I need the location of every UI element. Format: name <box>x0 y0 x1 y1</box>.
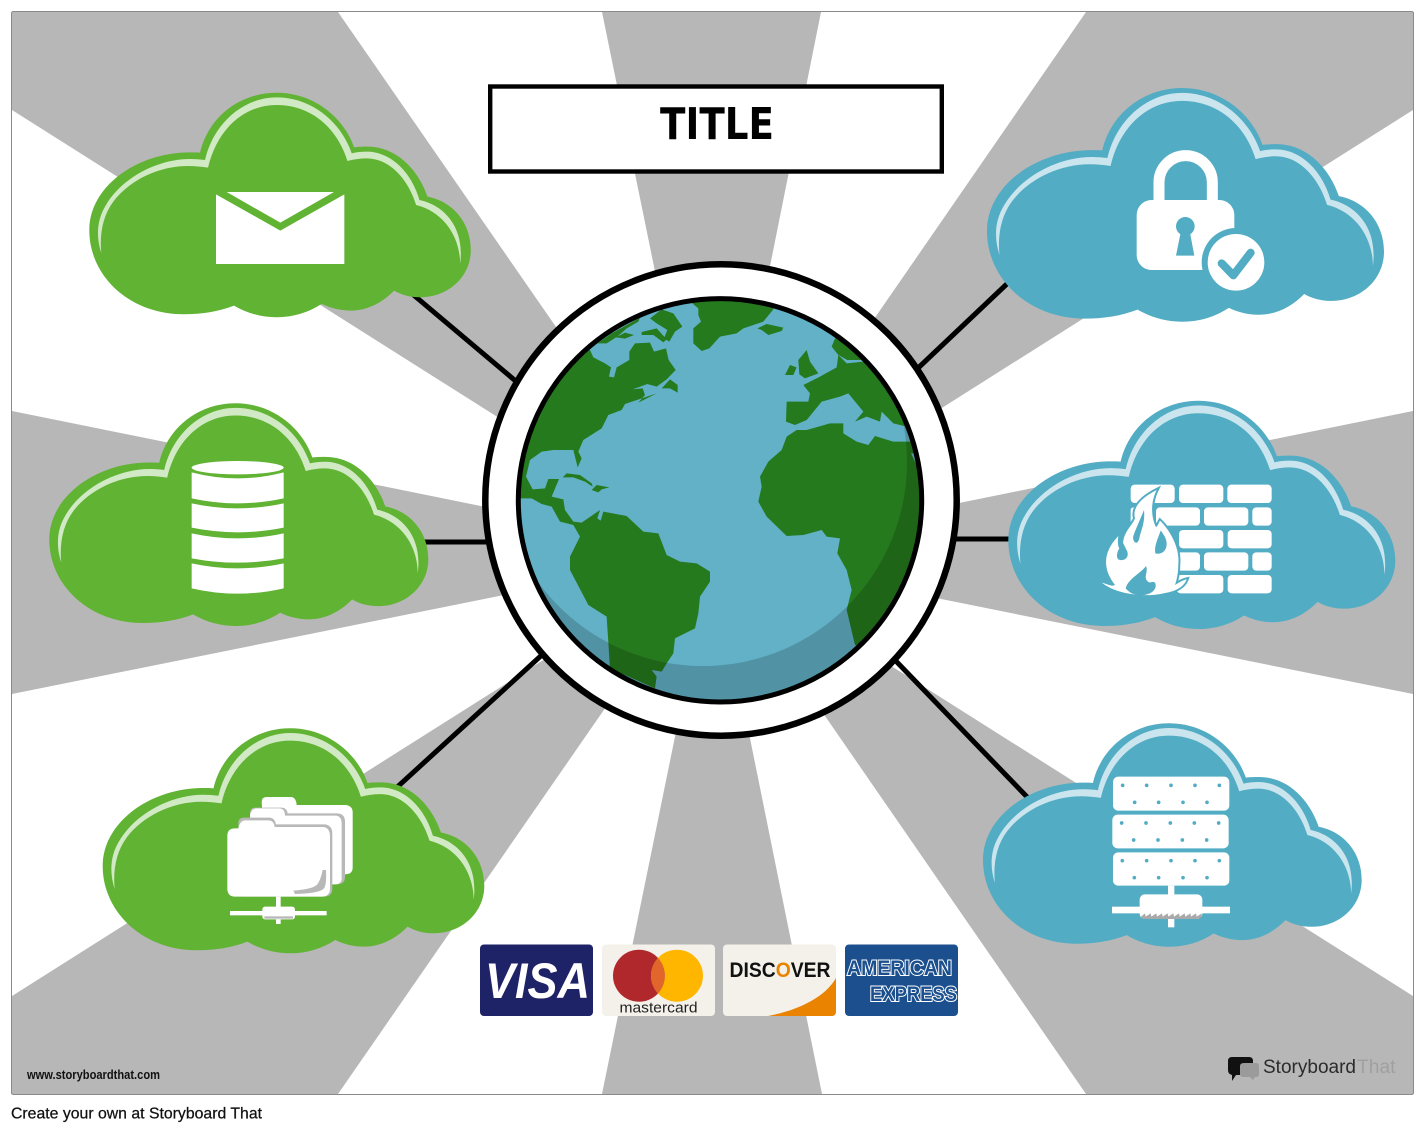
icon: envelope <box>216 192 344 264</box>
cloud: server rack <box>983 723 1362 947</box>
icon: database cylinder <box>192 461 284 594</box>
central globe <box>485 258 957 736</box>
card: Visa: VISA <box>485 953 590 1009</box>
card: Mastercard: mastercard <box>620 1000 698 1016</box>
card: Discover <box>723 944 836 1016</box>
logo: Storyboard That: That <box>1357 1057 1396 1078</box>
payment cards row <box>480 944 958 1016</box>
cloud: database <box>49 403 428 626</box>
cloud: folders <box>103 728 484 953</box>
cloud: email <box>89 93 471 317</box>
logo: Storyboard That: Storyboard <box>1263 1057 1356 1078</box>
card: American Express <box>845 944 958 1016</box>
icon: padlock with check <box>1137 156 1270 297</box>
card: Discover: DISCOVER <box>730 959 830 982</box>
cloud: security lock <box>987 88 1384 322</box>
cloud: firewall <box>1008 401 1395 629</box>
card: Mastercard <box>602 944 715 1016</box>
card: American Express: EXPRESS <box>870 983 957 1006</box>
globe map <box>520 301 920 700</box>
caption below frame: Create your own at Storyboard That <box>11 1106 263 1122</box>
title box <box>490 86 942 172</box>
footer url: www.storyboardthat.com <box>26 1068 160 1082</box>
title box: TITLE <box>660 99 774 150</box>
connector lines between clouds and globe <box>394 281 1030 800</box>
icon: network folders <box>227 797 353 924</box>
logo: Storyboard That <box>1228 1057 1396 1081</box>
globe shadow crescent <box>539 422 920 700</box>
card: American Express: AMERICAN <box>847 957 952 980</box>
icon: brick wall with flame <box>1102 485 1272 595</box>
icon: server stack <box>1112 777 1230 927</box>
